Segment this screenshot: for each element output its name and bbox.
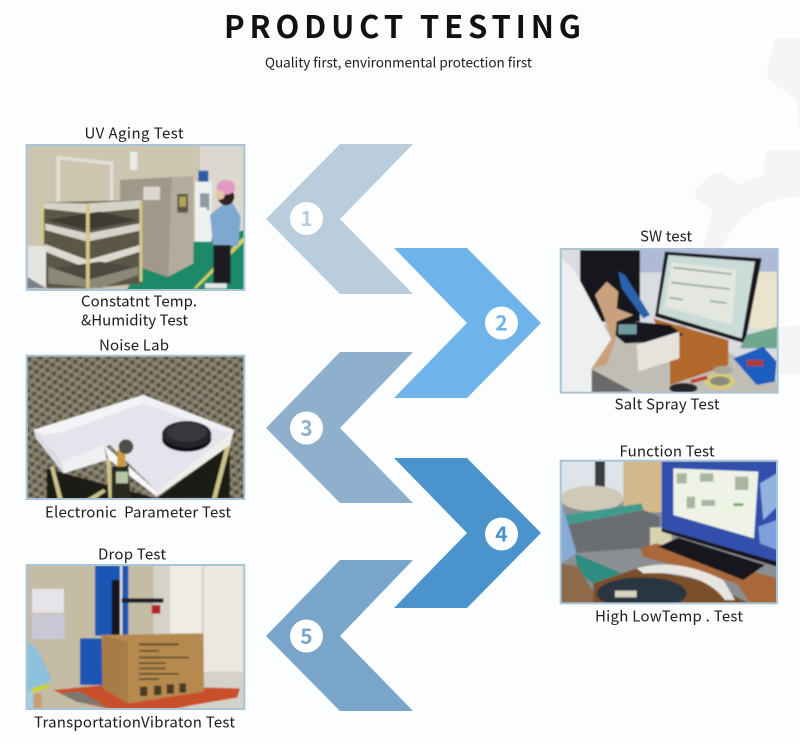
- label: Function Test: Function Test: [620, 440, 715, 462]
- label: UV Aging Test: UV Aging Test: [84, 122, 184, 144]
- label: SW test: SW test: [640, 226, 692, 246]
- chevron 4: [394, 458, 541, 608]
- photo: function test: [560, 461, 777, 609]
- label: Transportation Vibration Test: TransportationVibraton Test: [34, 712, 235, 732]
- title: PRODUCT TESTING: [224, 2, 581, 47]
- photo: SW test: [561, 249, 778, 394]
- label: Salt Spray Test: Salt Spray Test: [614, 394, 720, 414]
- chevron 1: [266, 144, 413, 294]
- chevron 1: 1: [300, 203, 313, 233]
- chevron 2: [394, 248, 541, 398]
- photo: drop test: [27, 565, 244, 709]
- label: Electronic Parameter Test: Electronic Parameter Test: [45, 502, 231, 522]
- label: Constant Temp and Humidity Test: Constatnt Temp.: [81, 290, 197, 312]
- photo: UV aging and temperature chamber: [27, 145, 244, 290]
- label: Noise Lab: Noise Lab: [99, 334, 169, 356]
- chevron 4: 4: [495, 518, 508, 548]
- label: High Low Temp Test: High LowTemp . Test: [595, 606, 743, 626]
- chevron 5: 5: [300, 620, 313, 650]
- label: Constant Temp and Humidity Test: &Humidity Test: [81, 310, 188, 330]
- photo: noise lab: [27, 356, 244, 499]
- label: Constant Temp and Humidity Test: [81, 290, 197, 330]
- chevron 3: [266, 352, 413, 503]
- chevron 2: 2: [495, 308, 508, 338]
- decorative gears: [694, 38, 800, 374]
- subtitle: Quality first, environmental protection first: [265, 52, 532, 72]
- label: Drop Test: Drop Test: [98, 544, 166, 564]
- chevron 3: 3: [300, 412, 313, 442]
- chevron 5: [266, 560, 413, 711]
